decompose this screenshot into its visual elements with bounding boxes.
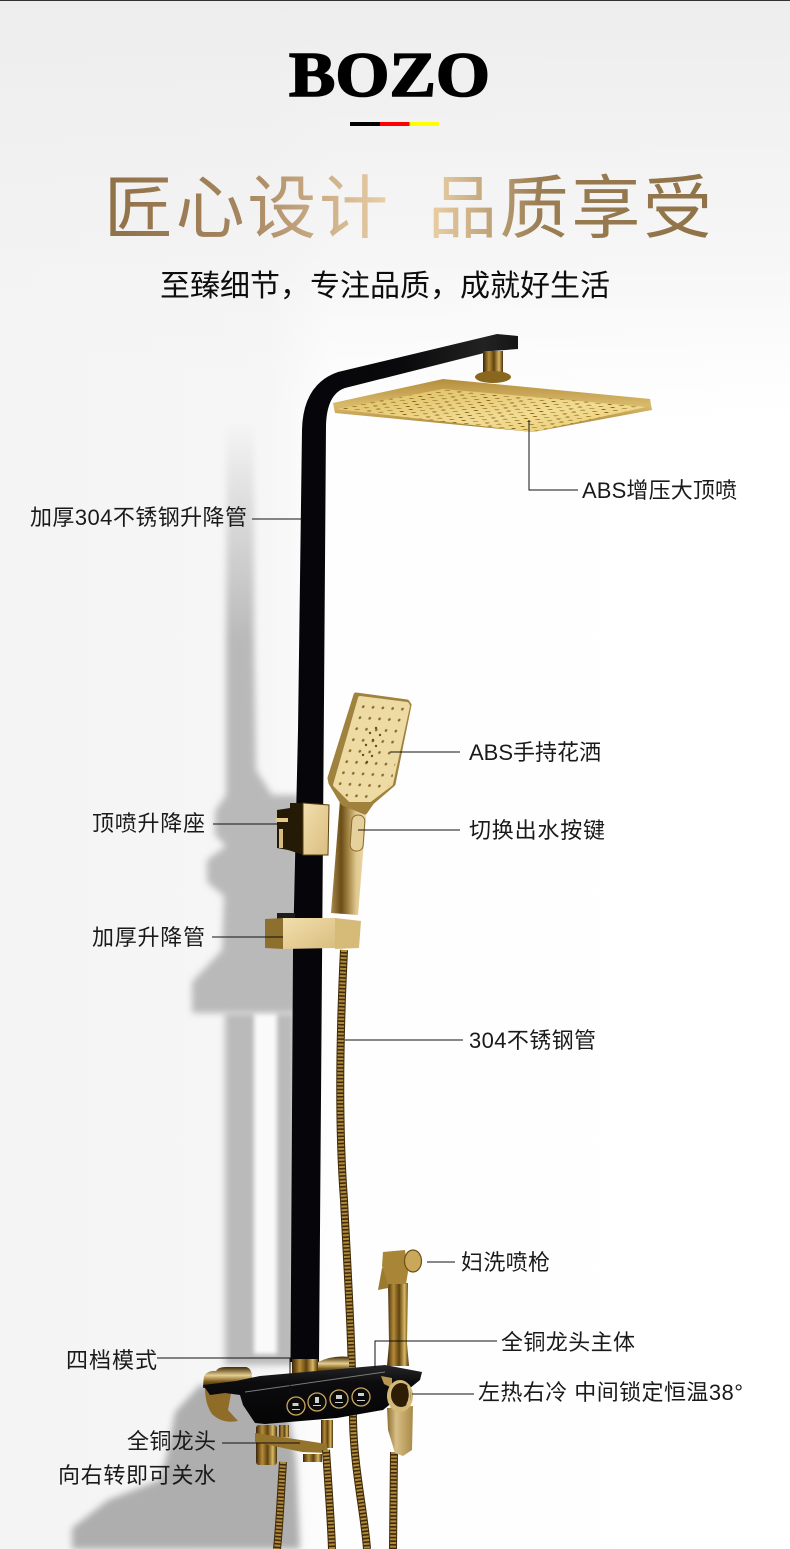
lower hoses [277, 1450, 394, 1549]
floor shadow [72, 1385, 300, 1549]
label: turn right: 向右转即可关水 [58, 1463, 216, 1488]
label: riser tube: 加厚304不锈钢升降管 [30, 505, 247, 530]
main upper shadow [192, 420, 300, 1013]
head top rim [333, 379, 652, 432]
gun nozzle [404, 1250, 422, 1272]
label: steel hose: 304不锈钢管 [469, 1028, 596, 1053]
label: temperature: 左热右冷 中间锁定恒温38° [478, 1380, 743, 1405]
thermostat shelf [203, 1365, 422, 1424]
label: copper faucet: 全铜龙头 [127, 1429, 216, 1454]
thermostat lever [381, 1376, 413, 1456]
label: bidet: 妇洗喷枪 [461, 1250, 550, 1275]
overhead shower head [333, 351, 652, 432]
highlight gap in shadow [254, 1014, 277, 1354]
head face [336, 389, 646, 432]
lower sliding bracket [265, 913, 361, 949]
label: switch button: 切换出水按键 [469, 818, 605, 843]
hand shower [330, 695, 409, 915]
handle [331, 800, 367, 915]
mode buttons [287, 1388, 370, 1415]
central jets [362, 727, 381, 763]
main title: 匠心设计 [104, 170, 388, 247]
shower column and arm [290, 334, 518, 1362]
wall shadow of shower set [72, 420, 300, 1549]
brand logo: BOZO [289, 40, 490, 110]
subtitle: 至臻细节，专注品质，成就好生活 [160, 270, 610, 303]
leader lines [157, 420, 578, 1443]
base pole collar [292, 1357, 349, 1375]
button icons [292, 1393, 365, 1410]
gun trigger [378, 1268, 392, 1290]
label: four modes: 四档模式 [66, 1348, 157, 1373]
german flag tricolour bar [350, 122, 439, 126]
label: thick lift tube: 加厚升降管 [92, 925, 205, 950]
shelf body [203, 1365, 422, 1424]
main title: 品质享受 [428, 170, 712, 247]
hose to hand shower [340, 950, 367, 1549]
bidet spray gun [378, 1250, 422, 1366]
label: hand shower: ABS手持花洒 [469, 740, 601, 765]
gun grip [387, 1283, 409, 1366]
main title [104, 170, 712, 247]
left bath outlet knob [203, 1367, 252, 1422]
hand head face [335, 698, 408, 800]
switch button [350, 815, 365, 851]
gun body [382, 1250, 408, 1284]
head connector [475, 351, 511, 383]
hand head back [330, 695, 409, 812]
label: top shower: ABS增压大顶喷 [582, 478, 737, 503]
label: copper body: 全铜龙头主体 [501, 1330, 635, 1355]
lower pole shadow [225, 1013, 295, 1365]
tub spout [255, 1420, 333, 1465]
label: lift seat: 顶喷升降座 [92, 811, 205, 836]
upper sliding seat [276, 803, 329, 855]
labels [30, 478, 743, 1488]
